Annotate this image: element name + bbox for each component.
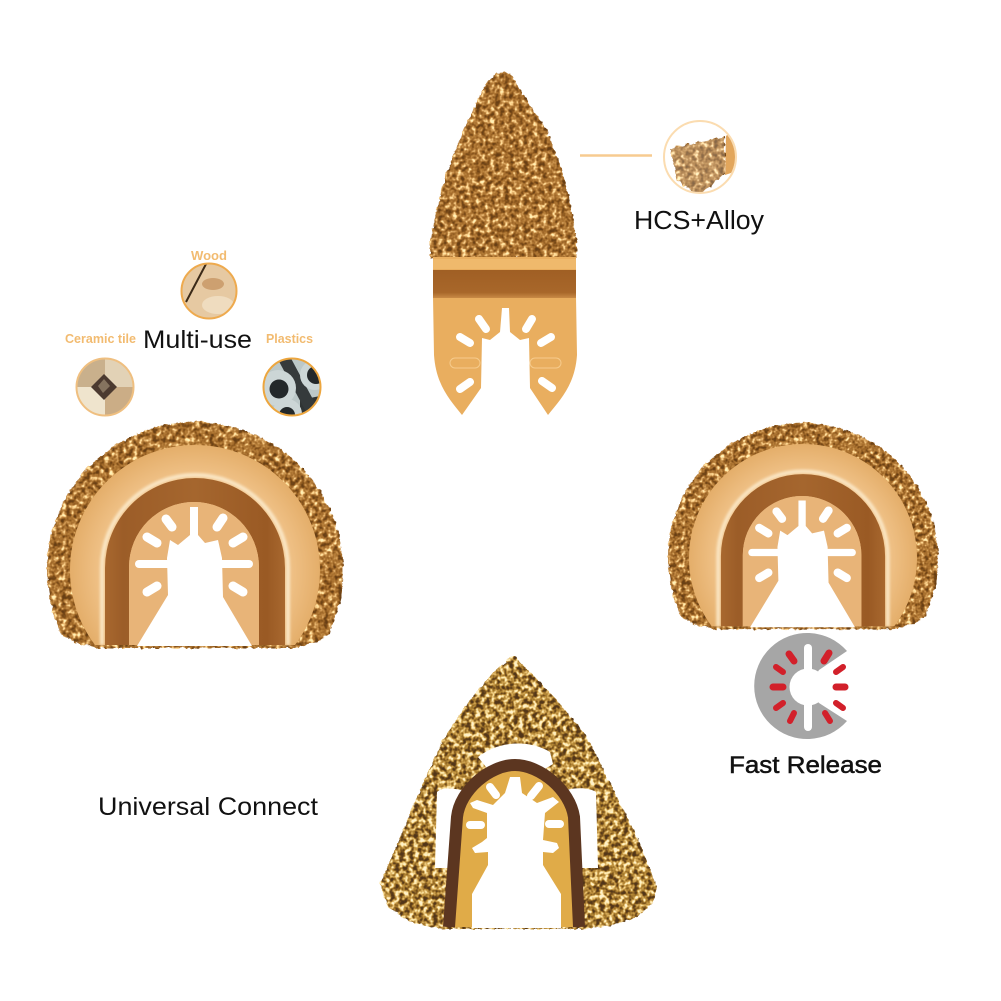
material: ceramic tile	[65, 332, 136, 416]
grit rim	[668, 423, 938, 629]
triangular grit body	[380, 655, 657, 929]
recessed U highlight	[718, 471, 888, 626]
horizontal slot	[139, 560, 249, 568]
recessed U band	[105, 478, 285, 645]
left window	[435, 788, 462, 868]
top window	[478, 744, 553, 772]
mount slots	[470, 786, 560, 825]
grit rim	[47, 422, 343, 648]
label: Fast Release: Fast Release	[729, 752, 882, 779]
mount slots	[759, 511, 847, 578]
pointed grit tip	[430, 72, 577, 258]
mount cutout	[750, 501, 855, 627]
recessed U band	[721, 474, 885, 626]
inner mount	[129, 502, 259, 645]
mount cutout	[137, 507, 252, 646]
mount slots	[460, 319, 552, 389]
material: plastics	[262, 334, 322, 416]
label: Plastics: Plastics	[266, 332, 313, 346]
mount cutout	[470, 777, 561, 928]
icon: fast release mount	[754, 633, 847, 739]
horizontal slot	[752, 549, 852, 557]
material: wood	[180, 249, 238, 320]
label: Wood: Wood	[191, 249, 227, 263]
label: Ceramic tile: Ceramic tile	[65, 332, 136, 346]
plate	[70, 445, 320, 645]
white slots	[804, 648, 812, 727]
dark U band	[449, 765, 579, 927]
inner mount	[449, 765, 579, 927]
blade: large semicircle blade	[47, 422, 343, 648]
blade plate	[433, 257, 577, 415]
dark band	[433, 270, 576, 298]
centre hole	[790, 668, 826, 706]
blade: triangle blade	[380, 655, 657, 929]
label: Universal Connect: Universal Connect	[98, 793, 318, 821]
mount slots	[147, 518, 243, 592]
label: HCS+Alloy: HCS+Alloy	[634, 207, 764, 235]
grey disc	[754, 633, 847, 739]
red tick marks	[773, 653, 845, 687]
recessed U highlight	[102, 475, 288, 645]
blade: small semicircle blade	[668, 423, 938, 629]
callout: material close-up	[664, 121, 740, 196]
light strip	[433, 259, 576, 269]
faint slots	[450, 358, 561, 368]
label: Multi-use: Multi-use	[143, 326, 252, 354]
callout line	[580, 154, 652, 157]
right window	[566, 788, 598, 868]
plate	[689, 444, 917, 626]
inner mount	[743, 496, 861, 626]
blade: pointed mitre blade	[430, 72, 577, 415]
